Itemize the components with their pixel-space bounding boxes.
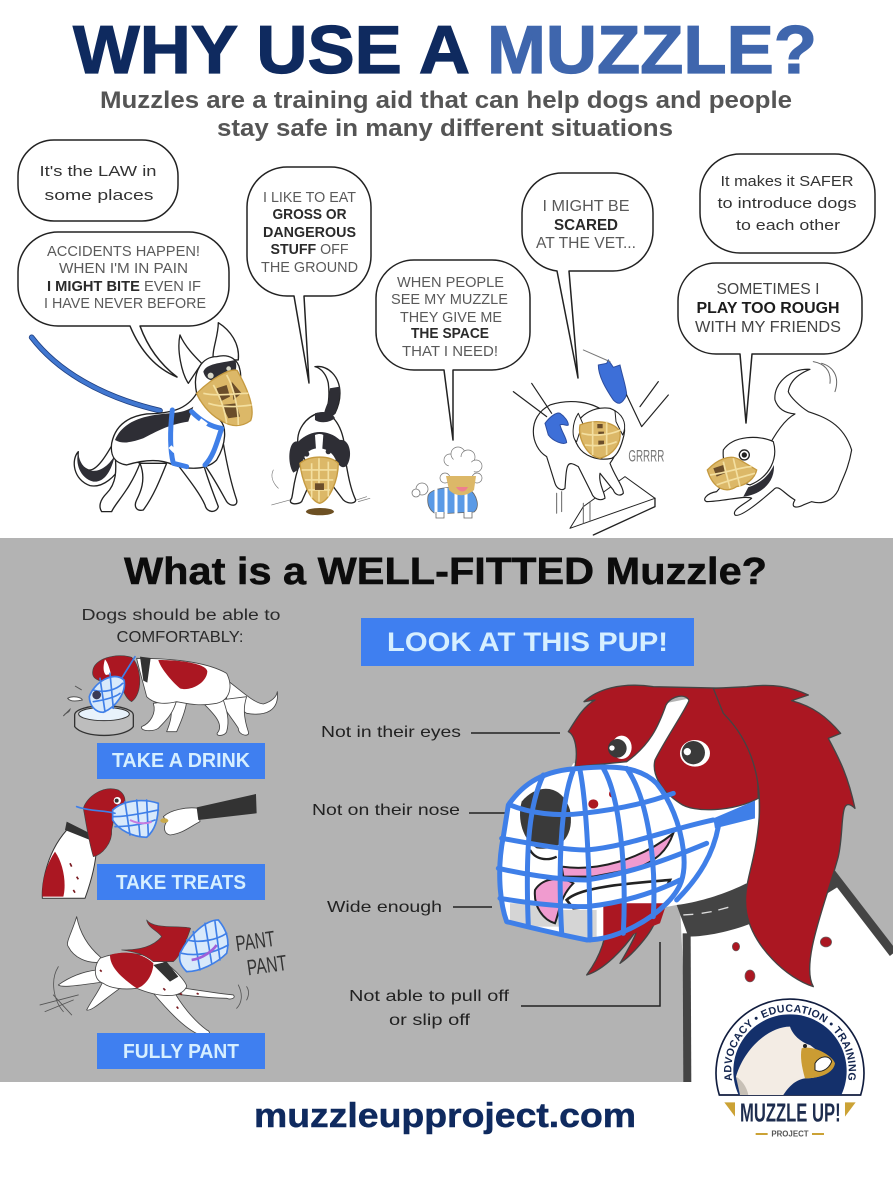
- eyes: [680, 740, 710, 767]
- speech bubble: accidents happen: ACCIDENTS HAPPEN!: [47, 243, 200, 260]
- logo: Muzzle Up! Project: ADVOCACY • EDUCATION • TRAINING: [724, 1004, 856, 1080]
- speech bubble: gross stuff: I LIKE TO EAT: [263, 189, 356, 206]
- website url: muzzleupproject.com: [254, 1097, 636, 1135]
- speech bubble: give me space: THE SPACE: [411, 325, 489, 342]
- button: fully pant: [97, 1033, 265, 1069]
- button: take a drink: [97, 743, 265, 779]
- speech bubble: give me space: SEE MY MUZZLE: [391, 291, 508, 308]
- speech bubble: gross stuff: GROSS OR: [272, 206, 347, 223]
- collar: [677, 867, 838, 937]
- button: take treats: [97, 864, 265, 900]
- illustration: dog running and panting: PANT: [245, 950, 288, 980]
- intro text: COMFORTABLY:: [116, 629, 244, 646]
- speech bubble: play too rough: PLAY TOO ROUGH: [696, 300, 840, 317]
- banner: look at this pup: [361, 618, 694, 666]
- illustration: dog on vet table: GRRRR: [628, 447, 664, 466]
- title: WHY USE A MUZZLE?: [73, 12, 817, 88]
- illustration: play bow dog: [705, 362, 852, 515]
- speech bubble: scared at the vet: I MIGHT BE: [542, 198, 630, 215]
- label: wide enough: Wide enough: [327, 899, 442, 916]
- face: [530, 698, 758, 923]
- muzzle cage: [498, 767, 718, 940]
- label: not able to pull off: Not able to pull off: [349, 988, 510, 1005]
- subtitle: stay safe in many different situations: [217, 115, 673, 142]
- mouth: [562, 833, 673, 877]
- speech bubble: safer to introduce: It makes it SAFER: [720, 173, 854, 190]
- speech bubble: scared at the vet: AT THE VET...: [536, 235, 636, 252]
- speech bubble: accidents happen: I HAVE NEVER BEFORE: [44, 295, 206, 312]
- label: not able to pull off: or slip off: [389, 1012, 471, 1029]
- button: fully pant: FULLY PANT: [123, 1041, 239, 1063]
- head fur: [568, 685, 758, 810]
- illustration: dog running and panting: [40, 917, 288, 1035]
- speech bubble: give me space: WHEN PEOPLE: [397, 274, 504, 291]
- illustration: dog running and panting: PANT: [234, 926, 276, 956]
- panel: well-fitted muzzle: [0, 538, 893, 1082]
- logo: Muzzle Up! Project: PROJECT: [771, 1130, 809, 1139]
- speech bubble: scared at the vet: SCARED: [554, 217, 618, 234]
- illustration: dog taking a treat: [42, 789, 257, 898]
- speech bubble: gross stuff: DANGEROUS: [263, 224, 356, 241]
- speech bubble: give me space: THAT I NEED!: [402, 343, 498, 360]
- illustration: large dog wearing a blue muzzle: [498, 685, 893, 1082]
- button: take a drink: TAKE A DRINK: [112, 750, 251, 772]
- speech bubble: gross stuff: STUFF OFF: [270, 241, 348, 258]
- snout: [500, 767, 684, 940]
- banner: look at this pup: LOOK AT THIS PUP!: [387, 627, 668, 657]
- button: take treats: TAKE TREATS: [116, 872, 246, 894]
- speech bubble: safer to introduce: [700, 154, 875, 253]
- label: not on their nose: Not on their nose: [312, 802, 460, 819]
- subtitle: Muzzles are a training aid that can help dogs and people: [100, 87, 792, 114]
- logo: Muzzle Up! Project: [715, 998, 865, 1139]
- speech bubble: play too rough: WITH MY FRIENDS: [695, 319, 841, 336]
- speech bubble: give me space: THEY GIVE ME: [400, 309, 502, 326]
- nose: [520, 789, 571, 849]
- speech bubble: gross stuff: THE GROUND: [261, 259, 358, 276]
- intro text: [82, 607, 280, 646]
- illustration: standing dog on leash: [32, 323, 252, 512]
- dog body: [680, 870, 893, 1082]
- speech bubble: safer to introduce: to introduce dogs: [718, 195, 856, 212]
- speech bubble: play too rough: [678, 263, 862, 423]
- illustration: dog on vet table: [513, 350, 668, 535]
- speech bubble: accidents happen: I MIGHT BITE EVEN IF: [47, 278, 201, 295]
- subtitle: [100, 87, 792, 142]
- speech bubble: law: It's the LAW in: [40, 163, 156, 180]
- intro text: Dogs should be able to: [82, 607, 280, 624]
- illustration: dog drinking: [63, 656, 278, 735]
- speech bubble: scared at the vet: [522, 173, 653, 378]
- speech bubble: give me space: [376, 260, 530, 440]
- speech bubble: gross stuff: [247, 167, 371, 383]
- illustration: small poodle in sweater: [412, 447, 482, 518]
- speech bubble: accidents happen: [18, 232, 229, 377]
- speech bubble: accidents happen: WHEN I'M IN PAIN: [59, 260, 188, 277]
- speech bubble: play too rough: SOMETIMES I: [716, 281, 820, 298]
- heading: What is a WELL-FITTED Muzzle?: [124, 551, 767, 593]
- beard: [587, 910, 657, 975]
- label: not able to pull off: [349, 942, 660, 1029]
- speech bubble: safer to introduce: to each other: [736, 217, 840, 234]
- label: not in their eyes: Not in their eyes: [321, 724, 461, 741]
- logo: Muzzle Up! Project: MUZZLE UP!: [740, 1098, 841, 1128]
- illustration: dog sniffing the ground: [272, 366, 370, 515]
- speech bubble: law: some places: [44, 187, 154, 204]
- speech bubble: law: [18, 140, 178, 221]
- ear: [713, 685, 855, 987]
